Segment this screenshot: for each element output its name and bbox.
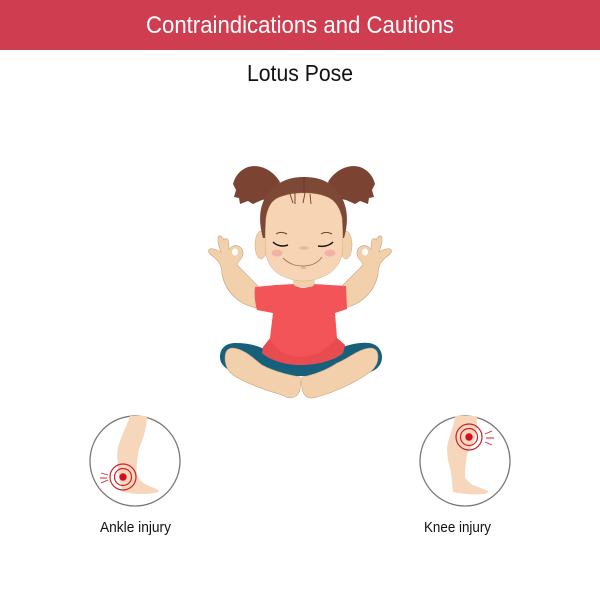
left leg: [225, 348, 301, 398]
subtitle: Lotus Pose: [247, 60, 353, 86]
fringe: [290, 193, 311, 204]
hair parting: [303, 177, 305, 193]
illustration: girl in lotus pose: [208, 166, 392, 398]
hair cap: [260, 177, 347, 238]
neck: [293, 276, 315, 287]
smile: [283, 257, 322, 266]
shorts: [220, 343, 382, 376]
cheeks: [272, 250, 336, 256]
face: [265, 193, 343, 281]
shirt shadows: [262, 338, 345, 365]
title: Contraindications and Cautions: [146, 12, 454, 39]
header banner: [0, 0, 600, 50]
right arm and hand: [342, 236, 392, 308]
panel: ankle injury: [90, 416, 180, 506]
label: ankle injury: Ankle injury: [100, 519, 171, 536]
ears: [255, 231, 267, 259]
nose: [299, 246, 309, 250]
leg silhouette: [117, 416, 159, 494]
icon circle: [420, 416, 510, 506]
pain rays: [100, 473, 108, 483]
hair buns: [233, 166, 375, 204]
eyebrows: [276, 232, 332, 234]
leg silhouette: [447, 416, 488, 494]
shirt: [255, 284, 347, 365]
icon circle: [90, 416, 180, 506]
left arm and hand: [208, 236, 258, 308]
pain target: [456, 424, 482, 450]
finger rings: [232, 248, 368, 256]
pain target: [110, 464, 136, 490]
pain rays: [485, 431, 494, 445]
panel: knee injury: [420, 416, 510, 506]
closed eyes: [273, 242, 333, 246]
label: knee injury: Knee injury: [424, 519, 491, 536]
right leg: [302, 348, 378, 398]
